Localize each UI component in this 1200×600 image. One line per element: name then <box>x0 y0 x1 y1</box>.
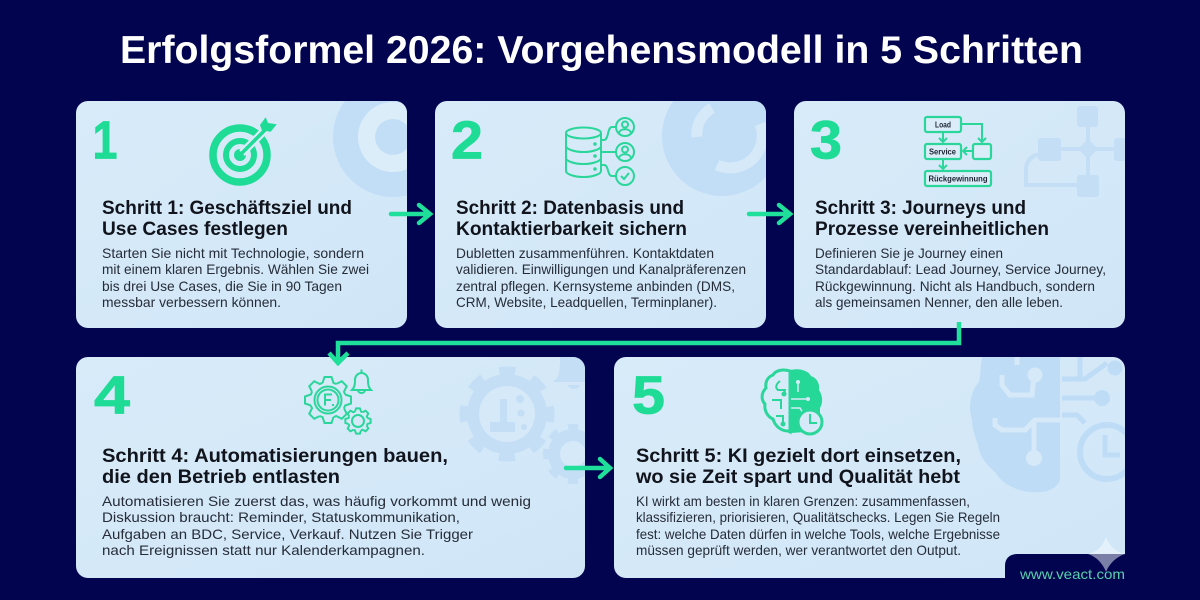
body text: klassifizieren, priorisieren, Qualitätschecks. Legen Sie Regeln <box>636 509 1000 525</box>
heading: Prozesse vereinheitlichen <box>815 218 1049 240</box>
body text: Starten Sie nicht mit Technologie, sondern <box>102 245 364 261</box>
step number 1: 1 <box>92 110 118 170</box>
body text <box>102 245 369 310</box>
body text: Diskussion braucht: Reminder, Statuskommunikation, <box>102 509 460 525</box>
body text: Aufgaben an BDC, Service, Verkauf. Nutzen Sie Trigger <box>102 526 473 542</box>
arrow: step 3 to 4 <box>329 322 959 363</box>
step number 2: 2 <box>451 110 483 170</box>
body text <box>815 245 1106 310</box>
body text: mit einem klaren Ergebnis. Wählen Sie zwei <box>102 261 369 277</box>
arrow: step 4 to 5 <box>566 459 610 477</box>
heading: Schritt 4: Automatisierungen bauen, <box>102 445 448 467</box>
watermark: brain and clock <box>970 357 1134 492</box>
body text: messbar verbessern können. <box>102 294 281 310</box>
watermark: flow diagram <box>1026 106 1136 197</box>
heading: Schritt 1: Geschäftsziel und <box>102 197 352 219</box>
panel: step 3 <box>794 101 1136 328</box>
icon: brain with clock <box>762 369 822 434</box>
heading: wo sie Zeit spart und Qualität hebt <box>635 466 960 488</box>
panel: step 1 <box>76 101 407 328</box>
icon: journey flow: Load <box>935 120 951 130</box>
body text: bis drei Use Cases, die Sie in 90 Tagen <box>102 278 342 294</box>
panel: step 4 <box>76 357 600 578</box>
body text: nach Ereignissen statt nur Kalenderkampagnen. <box>102 542 425 558</box>
watermark: target <box>333 101 407 197</box>
body text <box>636 493 1000 558</box>
heading: Use Cases festlegen <box>102 218 288 240</box>
sparkle <box>1088 537 1125 572</box>
body text: Definieren Sie je Journey einen <box>815 245 1003 261</box>
body text: als gemeinsamen Nenner, den alle leben. <box>815 294 1063 310</box>
body text: KI wirkt am besten in klaren Grenzen: zusammenfassen, <box>636 493 970 509</box>
body text: CRM, Website, Leadquellen, Terminplaner). <box>456 294 717 310</box>
body text: fest: welche Daten dürfen in welche Tools, welche Ergebnisse <box>636 526 1000 542</box>
heading <box>635 445 961 488</box>
arrow: step 2 to 3 <box>749 205 790 223</box>
title: Erfolgsformel 2026: Vorgehensmodell in 5 Schritten <box>120 29 1083 72</box>
body text: validieren. Einwilligungen und Kanalpräferenzen <box>456 261 746 277</box>
body text: Dubletten zusammenführen. Kontaktdaten <box>456 245 714 261</box>
heading: Schritt 5: KI gezielt dort einsetzen, <box>636 445 961 467</box>
body text: zentral pflegen. Kernsysteme anbinden (DMS, <box>456 278 735 294</box>
heading <box>815 197 1049 240</box>
heading: Kontaktierbarkeit sichern <box>456 218 687 240</box>
website url: www.veact.com <box>1019 566 1125 582</box>
icon: target with arrow <box>213 117 277 182</box>
heading: Schritt 2: Datenbasis und <box>456 197 684 219</box>
heading: die den Betrieb entlasten <box>102 466 340 488</box>
body text: Automatisieren Sie zuerst das, was häufig vorkommt und wenig <box>102 493 531 509</box>
watermark: ring <box>662 101 766 196</box>
panel: step 5 <box>614 357 1134 578</box>
body text: müssen geprüft werden, wer verantwortet den Output. <box>636 542 961 558</box>
heading <box>102 445 448 488</box>
step number 5: 5 <box>632 366 665 426</box>
icon: journey flow: Rückgewinnung <box>928 174 988 184</box>
corner tab with website <box>1005 537 1125 582</box>
body text: Rückgewinnung. Nicht als Handbuch, sondern <box>815 278 1095 294</box>
body text: Standardablauf: Lead Journey, Service Journey, <box>815 261 1106 277</box>
watermark: gears <box>464 357 600 481</box>
step number 3: 3 <box>810 110 842 170</box>
arrow: step 1 to 2 <box>391 205 430 223</box>
body text <box>102 493 531 558</box>
panel: step 2 <box>435 101 766 328</box>
icon: database with contacts <box>566 118 634 185</box>
icon: journey flow <box>925 117 991 186</box>
icon: gears and bell <box>305 370 371 434</box>
icon: journey flow: Service <box>929 148 957 156</box>
heading <box>102 197 352 240</box>
step number 4: 4 <box>94 366 130 426</box>
heading <box>456 197 687 240</box>
heading: Schritt 3: Journeys und <box>815 197 1026 219</box>
body text <box>456 245 746 310</box>
